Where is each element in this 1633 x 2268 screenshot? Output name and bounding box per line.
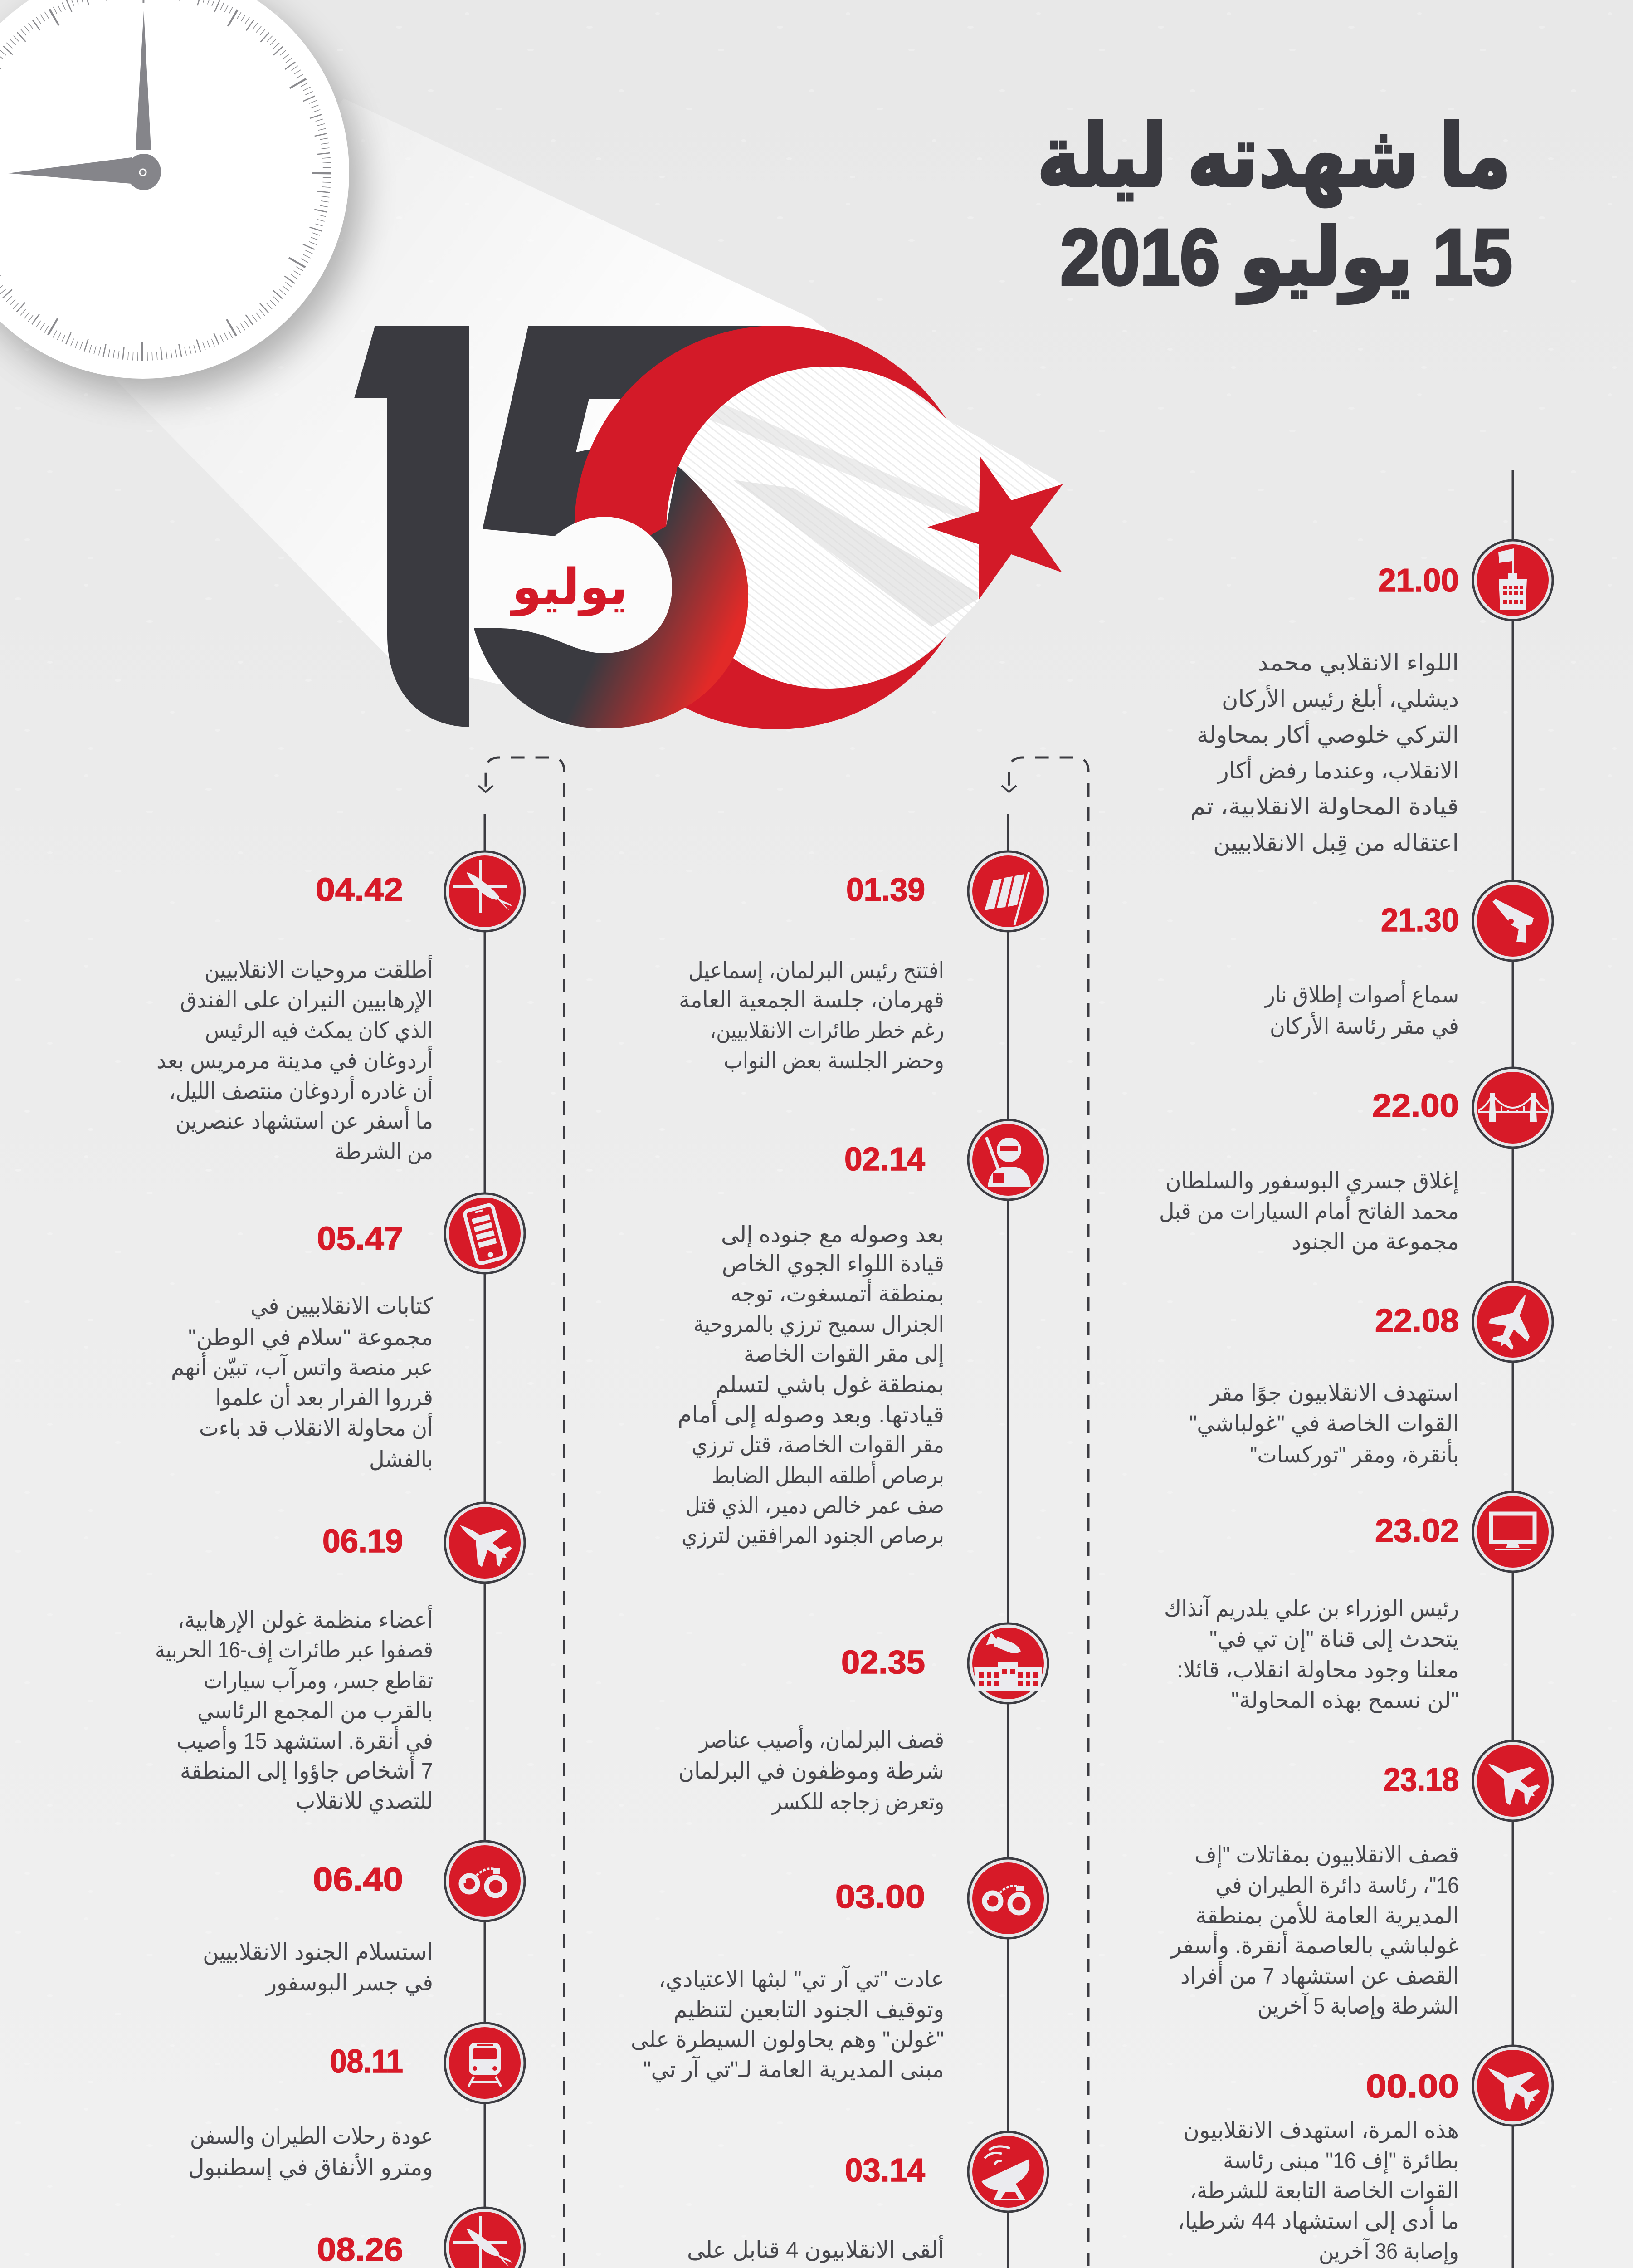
time: 21.00 (1378, 562, 1459, 599)
description: مقر القوات الخاصة، قتل ترزي (692, 1432, 944, 1458)
description: قهرمان، جلسة الجمعية العامة (679, 987, 944, 1013)
description: في أنقرة. استشهد 15 وأصيب (176, 1726, 433, 1755)
entry: 01.39 (679, 851, 1048, 1074)
icon: helicopter crosshair (445, 851, 525, 931)
description (1170, 1842, 1459, 2019)
icon: satellite dish (968, 2132, 1048, 2212)
time: 23.18 (1384, 1762, 1459, 1798)
description: أطلقت مروحيات الانقلابيين (205, 955, 433, 983)
description: بالقرب من المجمع الرئاسي (197, 1698, 433, 1724)
entry: 06.40 (203, 1841, 525, 1996)
time: 21.30 (1381, 902, 1459, 938)
description (1159, 1168, 1459, 1255)
description: الشرطة وإصابة 5 آخرين (1258, 1992, 1459, 2019)
description: قصف الانقلابيون بمقاتلات "إف (1194, 1842, 1459, 1868)
entry: 23.18 (1170, 1741, 1553, 2019)
description: أن محاولة الانقلاب قد باءت (199, 1413, 433, 1442)
description: المديرية العامة للأمن بمنطقة (1195, 1901, 1459, 1929)
description: بأنقرة، ومقر "توركسات" (1250, 1439, 1459, 1468)
time: 22.00 (1372, 1088, 1459, 1124)
description: 7 أشخاص جاؤوا إلى المنطقة (180, 1756, 433, 1784)
ribbon behind crescent (667, 367, 1063, 689)
description: القصف عن استشهاد 7 من أفراد (1180, 1961, 1459, 1989)
icon: fighter jet (1473, 1282, 1553, 1362)
description: عودة رحلات الطيران والسفن (190, 2123, 433, 2150)
icon: bomb over parliament (968, 1623, 1048, 1703)
icon: fighter jet (1473, 1741, 1553, 1821)
title (1037, 108, 1512, 304)
icon: building with flag (1473, 540, 1553, 620)
description (678, 1725, 944, 1815)
entry: 04.42 (156, 851, 525, 1164)
description: عادت "تي آر تي" لبثها الاعتيادي، (658, 1965, 944, 1993)
description: استهدف الانقلابيون جوًا مقر (1208, 1380, 1459, 1407)
entry: 05.47 (171, 1193, 525, 1472)
white lobe (469, 517, 672, 653)
entry: 21.00 (1190, 540, 1553, 856)
icon: television (1473, 1492, 1553, 1572)
description: اللواء الانقلابي محمد (1258, 650, 1459, 676)
time: 01.39 (846, 872, 925, 908)
light beam from clock (115, 98, 946, 726)
description (1178, 2117, 1459, 2265)
icon: metro train (445, 2023, 525, 2103)
description: هذه المرة، استهدف الانقلابيون (1183, 2117, 1459, 2144)
time: 04.42 (316, 872, 403, 908)
entry: 22.00 (1159, 1068, 1553, 1255)
description: صف عمر خالص دمير، الذي قتل (686, 1493, 944, 1519)
15 July emblem (354, 326, 1088, 729)
description: استسلام الجنود الانقلابيين (203, 1939, 433, 1965)
time: 08.26 (317, 2232, 403, 2268)
time: 03.00 (835, 1879, 925, 1915)
time: 06.19 (322, 1523, 403, 1559)
description: مبنى المديرية العامة لـ"تي آر تي" (643, 2056, 944, 2082)
description: قيادة اللواء الجوي الخاص (722, 1251, 944, 1277)
time: 05.47 (317, 1221, 403, 1257)
entry: 02.14 (678, 1120, 1048, 1549)
entry: 02.35 (678, 1623, 1048, 1815)
entry: 00.00 (1178, 2046, 1553, 2265)
description (1189, 1380, 1459, 1468)
description: من الشرطة (335, 1139, 433, 1164)
description: ومترو الأنفاق في إسطنبول (188, 2153, 433, 2181)
month label: يوليو (510, 559, 628, 616)
description: برصاص الجنود المرافقين لترزي (682, 1523, 944, 1549)
description: الانقلاب، وعندما رفض أكار (1217, 756, 1459, 784)
description: رئيس الوزراء بن علي يلدريم آنذاك (1164, 1595, 1459, 1622)
description: بطائرة "إف 16" مبنى رئاسة (1223, 2148, 1459, 2174)
time: 23.02 (1375, 1513, 1459, 1549)
time: 03.14 (845, 2152, 925, 2189)
description (171, 1293, 433, 1472)
description: وتوقيف الجنود التابعين لتنظيم (673, 1997, 944, 2023)
description: القوات الخاصة التابعة للشرطة، (1190, 2178, 1459, 2204)
timeline connectors (478, 470, 1513, 2268)
description: في مقر رئاسة الأركان (1270, 1012, 1459, 1039)
description: قصف البرلمان، وأصيب عناصر (698, 1725, 944, 1754)
description (188, 2123, 433, 2181)
description: ما أدى إلى استشهاد 44 شرطيا، (1178, 2206, 1459, 2234)
description: أعضاء منظمة غولن الإرهابية، (177, 1605, 433, 1633)
description: عبر منصة واتس آب، تبيّن أنهم (171, 1352, 433, 1381)
description: التركي خلوصي أكار بمحاولة (1197, 720, 1459, 748)
entry: 03.14 (687, 2132, 1048, 2268)
description (155, 1605, 433, 1814)
icon: bridge (1473, 1068, 1553, 1148)
icon: helicopter crosshair (445, 2208, 525, 2268)
description: بالفشل (369, 1447, 433, 1472)
description: مجموعة "سلام في الوطن" (188, 1325, 433, 1350)
entry: 08.11 (188, 2023, 525, 2181)
icon: handcuffs (445, 1841, 525, 1921)
description (156, 955, 433, 1164)
entry: 03.00 (631, 1858, 1048, 2082)
description: برصاص أطلقه البطل الضابط (712, 1461, 944, 1489)
title: 15 يوليو 2016 (1060, 213, 1512, 304)
description: "غولن" وهم يحاولون السيطرة على (631, 2027, 944, 2053)
description (678, 1222, 944, 1549)
icon: armed soldier (968, 1120, 1048, 1200)
description (631, 1965, 944, 2082)
entry: 06.19 (155, 1503, 525, 1814)
description: الإرهابيين النيران على الفندق (180, 987, 433, 1013)
entry: 21.30 (1264, 881, 1553, 1039)
icon: handcuffs (968, 1858, 1048, 1938)
description: سماع أصوات إطلاق نار (1264, 980, 1459, 1008)
description: مجموعة من الجنود (1292, 1229, 1459, 1255)
description: قرروا الفرار بعد أن علموا (215, 1383, 433, 1411)
description: شرطة وموظفون في البرلمان (678, 1758, 944, 1784)
bowl of numeral 5 (474, 466, 748, 728)
description: بعد وصوله مع جنوده إلى (721, 1222, 944, 1248)
description (203, 1939, 433, 1996)
description: ألقى الانقلابيون 4 قنابل على (687, 2235, 944, 2263)
time: 06.40 (313, 1862, 403, 1898)
description: الذي كان يمكث فيه الرئيس (205, 1017, 433, 1043)
title: ما شهدته ليلة (1037, 108, 1511, 207)
description: القوات الخاصة في "غولباشي" (1189, 1411, 1459, 1437)
crescent (575, 326, 946, 729)
description (679, 958, 944, 1074)
icon: flag (968, 851, 1048, 931)
entry: 08.26 (195, 2208, 525, 2268)
description: محمد الفاتح أمام السيارات من قبل (1159, 1196, 1459, 1225)
icon: fighter jet (1473, 2046, 1553, 2126)
description: غولباشي بالعاصمة أنقرة. وأسفر (1170, 1931, 1459, 1959)
icon: smartphone with messages (445, 1193, 525, 1273)
time: 08.11 (330, 2043, 403, 2080)
description: وتعرض زجاجه للكسر (771, 1789, 944, 1815)
description: تقاطع جسر، ومرآب سيارات (204, 1667, 433, 1694)
description: وإصابة 36 آخرين (1319, 2238, 1459, 2265)
description: للتصدي للانقلاب (296, 1788, 433, 1814)
description: معلنا وجود محاولة انقلاب، قائلا: (1177, 1657, 1459, 1683)
entry: 22.08 (1189, 1282, 1553, 1468)
entry: 23.02 (1164, 1492, 1553, 1714)
description: بمنطقة غول باشي لتسلم (715, 1372, 944, 1398)
icon: fighter jet (445, 1503, 525, 1583)
description: 16"، رئاسة دائرة الطيران في (1215, 1872, 1459, 1898)
description: قصفوا عبر طائرات إف-16 الحربية (155, 1637, 433, 1663)
description: أن غادره أردوغان منتصف الليل، (169, 1076, 433, 1105)
icon: pistol (1473, 881, 1553, 961)
time: 02.14 (844, 1141, 925, 1178)
description: أردوغان في مدينة مرمريس بعد (156, 1046, 433, 1074)
description (1164, 1595, 1459, 1714)
description: ما أسفر عن استشهاد عنصرين (175, 1106, 433, 1134)
description: "لن نسمح بهذه المحاولة" (1231, 1687, 1459, 1714)
description: اعتقاله من قِبل الانقلابيين (1213, 830, 1459, 856)
description: رغم خطر طائرات الانقلابيين، (710, 1017, 944, 1043)
description: افتتح رئيس البرلمان، إسماعيل (688, 958, 944, 984)
description: إغلاق جسري البوسفور والسلطان (1165, 1168, 1459, 1194)
description: إلى مقر القوات الخاصة (744, 1341, 944, 1368)
numeral 1 (354, 326, 469, 727)
description: ديشلي، أبلغ رئيس الأركان (1222, 684, 1459, 713)
description: بمنطقة أتمسغوت، توجه (731, 1279, 944, 1307)
description: قيادتها. وبعد وصوله إلى أمام (678, 1400, 944, 1428)
clock (0, 0, 361, 395)
clock hands (8, 11, 161, 190)
numeral 5 top (483, 326, 777, 536)
description: يتحدث إلى قناة "إن تي في" (1209, 1626, 1459, 1652)
description: وحضر الجلسة بعض النواب (724, 1048, 944, 1074)
time: 22.08 (1375, 1303, 1459, 1339)
description: كتابات الانقلابيين في (250, 1293, 433, 1319)
star (927, 456, 1063, 599)
description: الجنرال سميح ترزي بالمروحية (693, 1311, 944, 1338)
description (1190, 650, 1459, 856)
time: 00.00 (1366, 2068, 1459, 2105)
description (1264, 980, 1459, 1039)
time: 02.35 (841, 1644, 925, 1681)
description: في جسر البوسفور (265, 1970, 433, 1996)
description: قيادة المحاولة الانقلابية، تم (1190, 794, 1459, 820)
